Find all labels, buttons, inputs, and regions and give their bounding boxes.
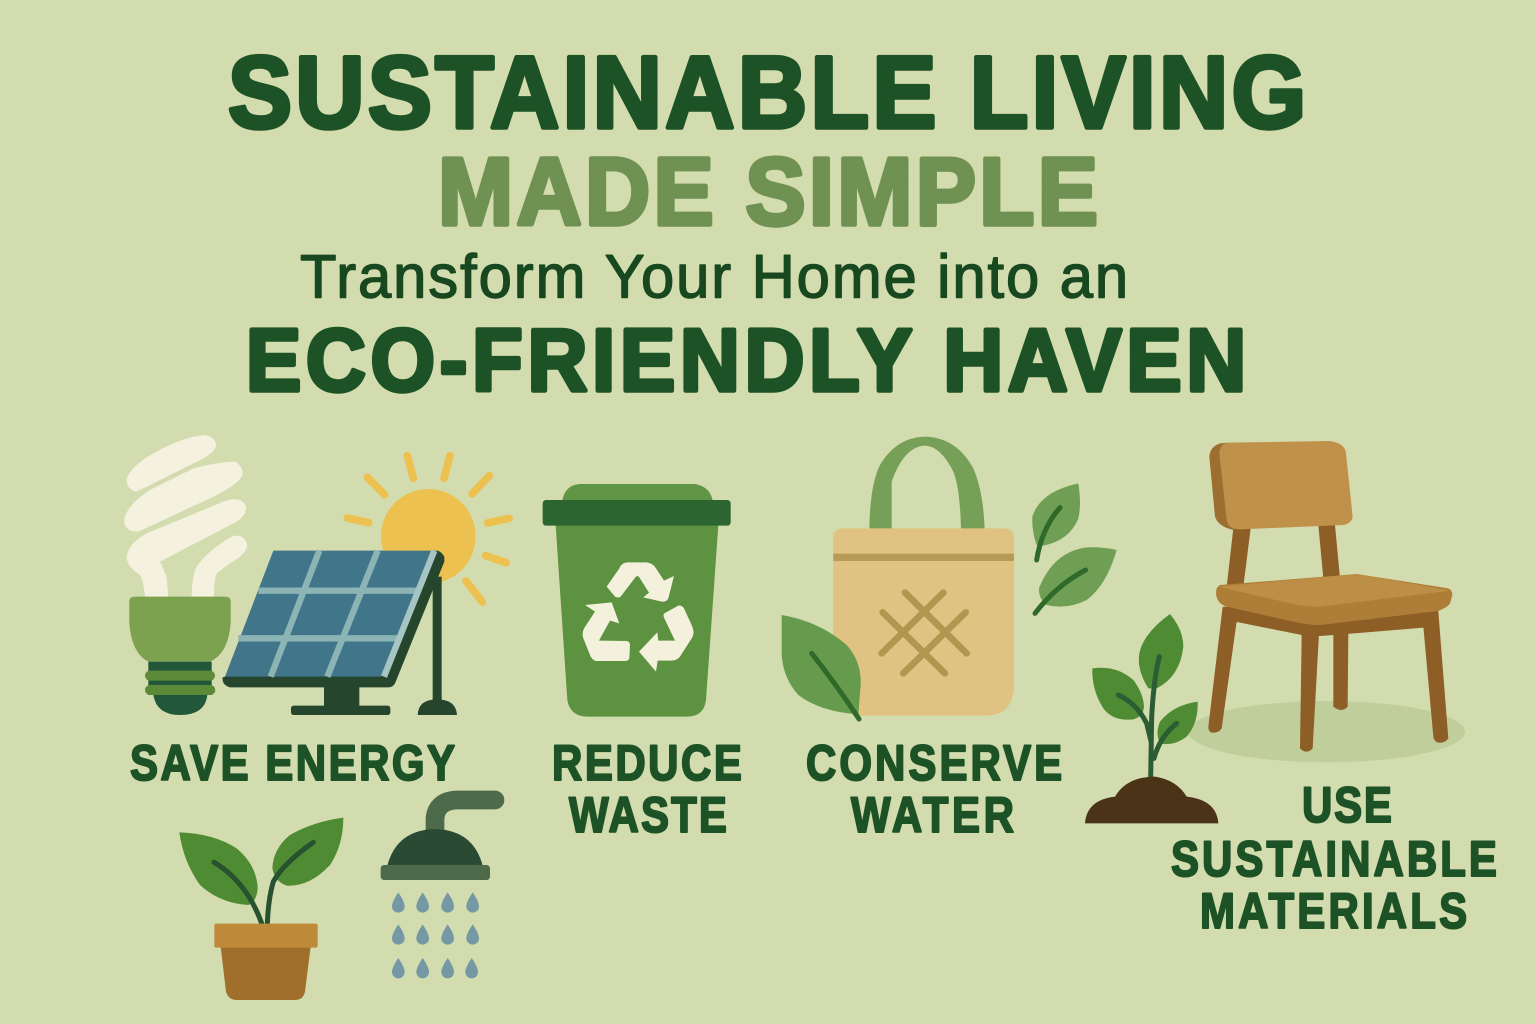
heading: Eco-Friendly Haven: ECO-FRIENDLY HAVEN <box>246 312 1246 410</box>
icon: shower head <box>381 800 495 978</box>
label: Conserve Water <box>806 735 1062 843</box>
chair seat <box>1216 574 1452 625</box>
label: Conserve Water: WATER <box>851 787 1014 843</box>
label: Reduce Waste <box>552 735 742 843</box>
icon: solar panel <box>223 551 457 715</box>
subtitle: Made Simple: MADE SIMPLE <box>438 138 1098 245</box>
label: Use Sustainable Materials: SUSTAINABLE <box>1171 831 1497 887</box>
icon: bag leaf lower left <box>782 615 861 719</box>
label: Use Sustainable Materials <box>1171 777 1497 939</box>
chair back legs <box>1227 525 1348 710</box>
icon: sun <box>347 456 509 602</box>
icon: seedling in soil <box>1085 614 1218 823</box>
icon: tote bag with leaves <box>782 437 1117 719</box>
chair backrest <box>1209 441 1353 530</box>
tagline: Transform Your Home into an: Transform Your Home into an <box>300 242 1128 311</box>
icon: recycling bin <box>543 484 731 717</box>
icon: upper right leaves <box>1032 483 1117 613</box>
label: Use Sustainable Materials: USE <box>1302 777 1392 833</box>
title: Sustainable Living: SUSTAINABLE LIVING <box>228 35 1306 149</box>
label: Conserve Water: CONSERVE <box>806 735 1062 791</box>
label: Save Energy: SAVE ENERGY <box>130 735 455 791</box>
label: Reduce Waste: REDUCE <box>552 735 742 791</box>
icon: potted plant <box>179 818 343 1000</box>
chair frame and front legs <box>1208 607 1448 752</box>
icon: energy-saving light bulb <box>124 435 247 715</box>
label: Use Sustainable Materials: MATERIALS <box>1200 883 1467 939</box>
label: Reduce Waste: WASTE <box>569 787 727 843</box>
icon: wooden chair <box>1188 441 1465 762</box>
icon: recycling symbol <box>583 562 694 672</box>
